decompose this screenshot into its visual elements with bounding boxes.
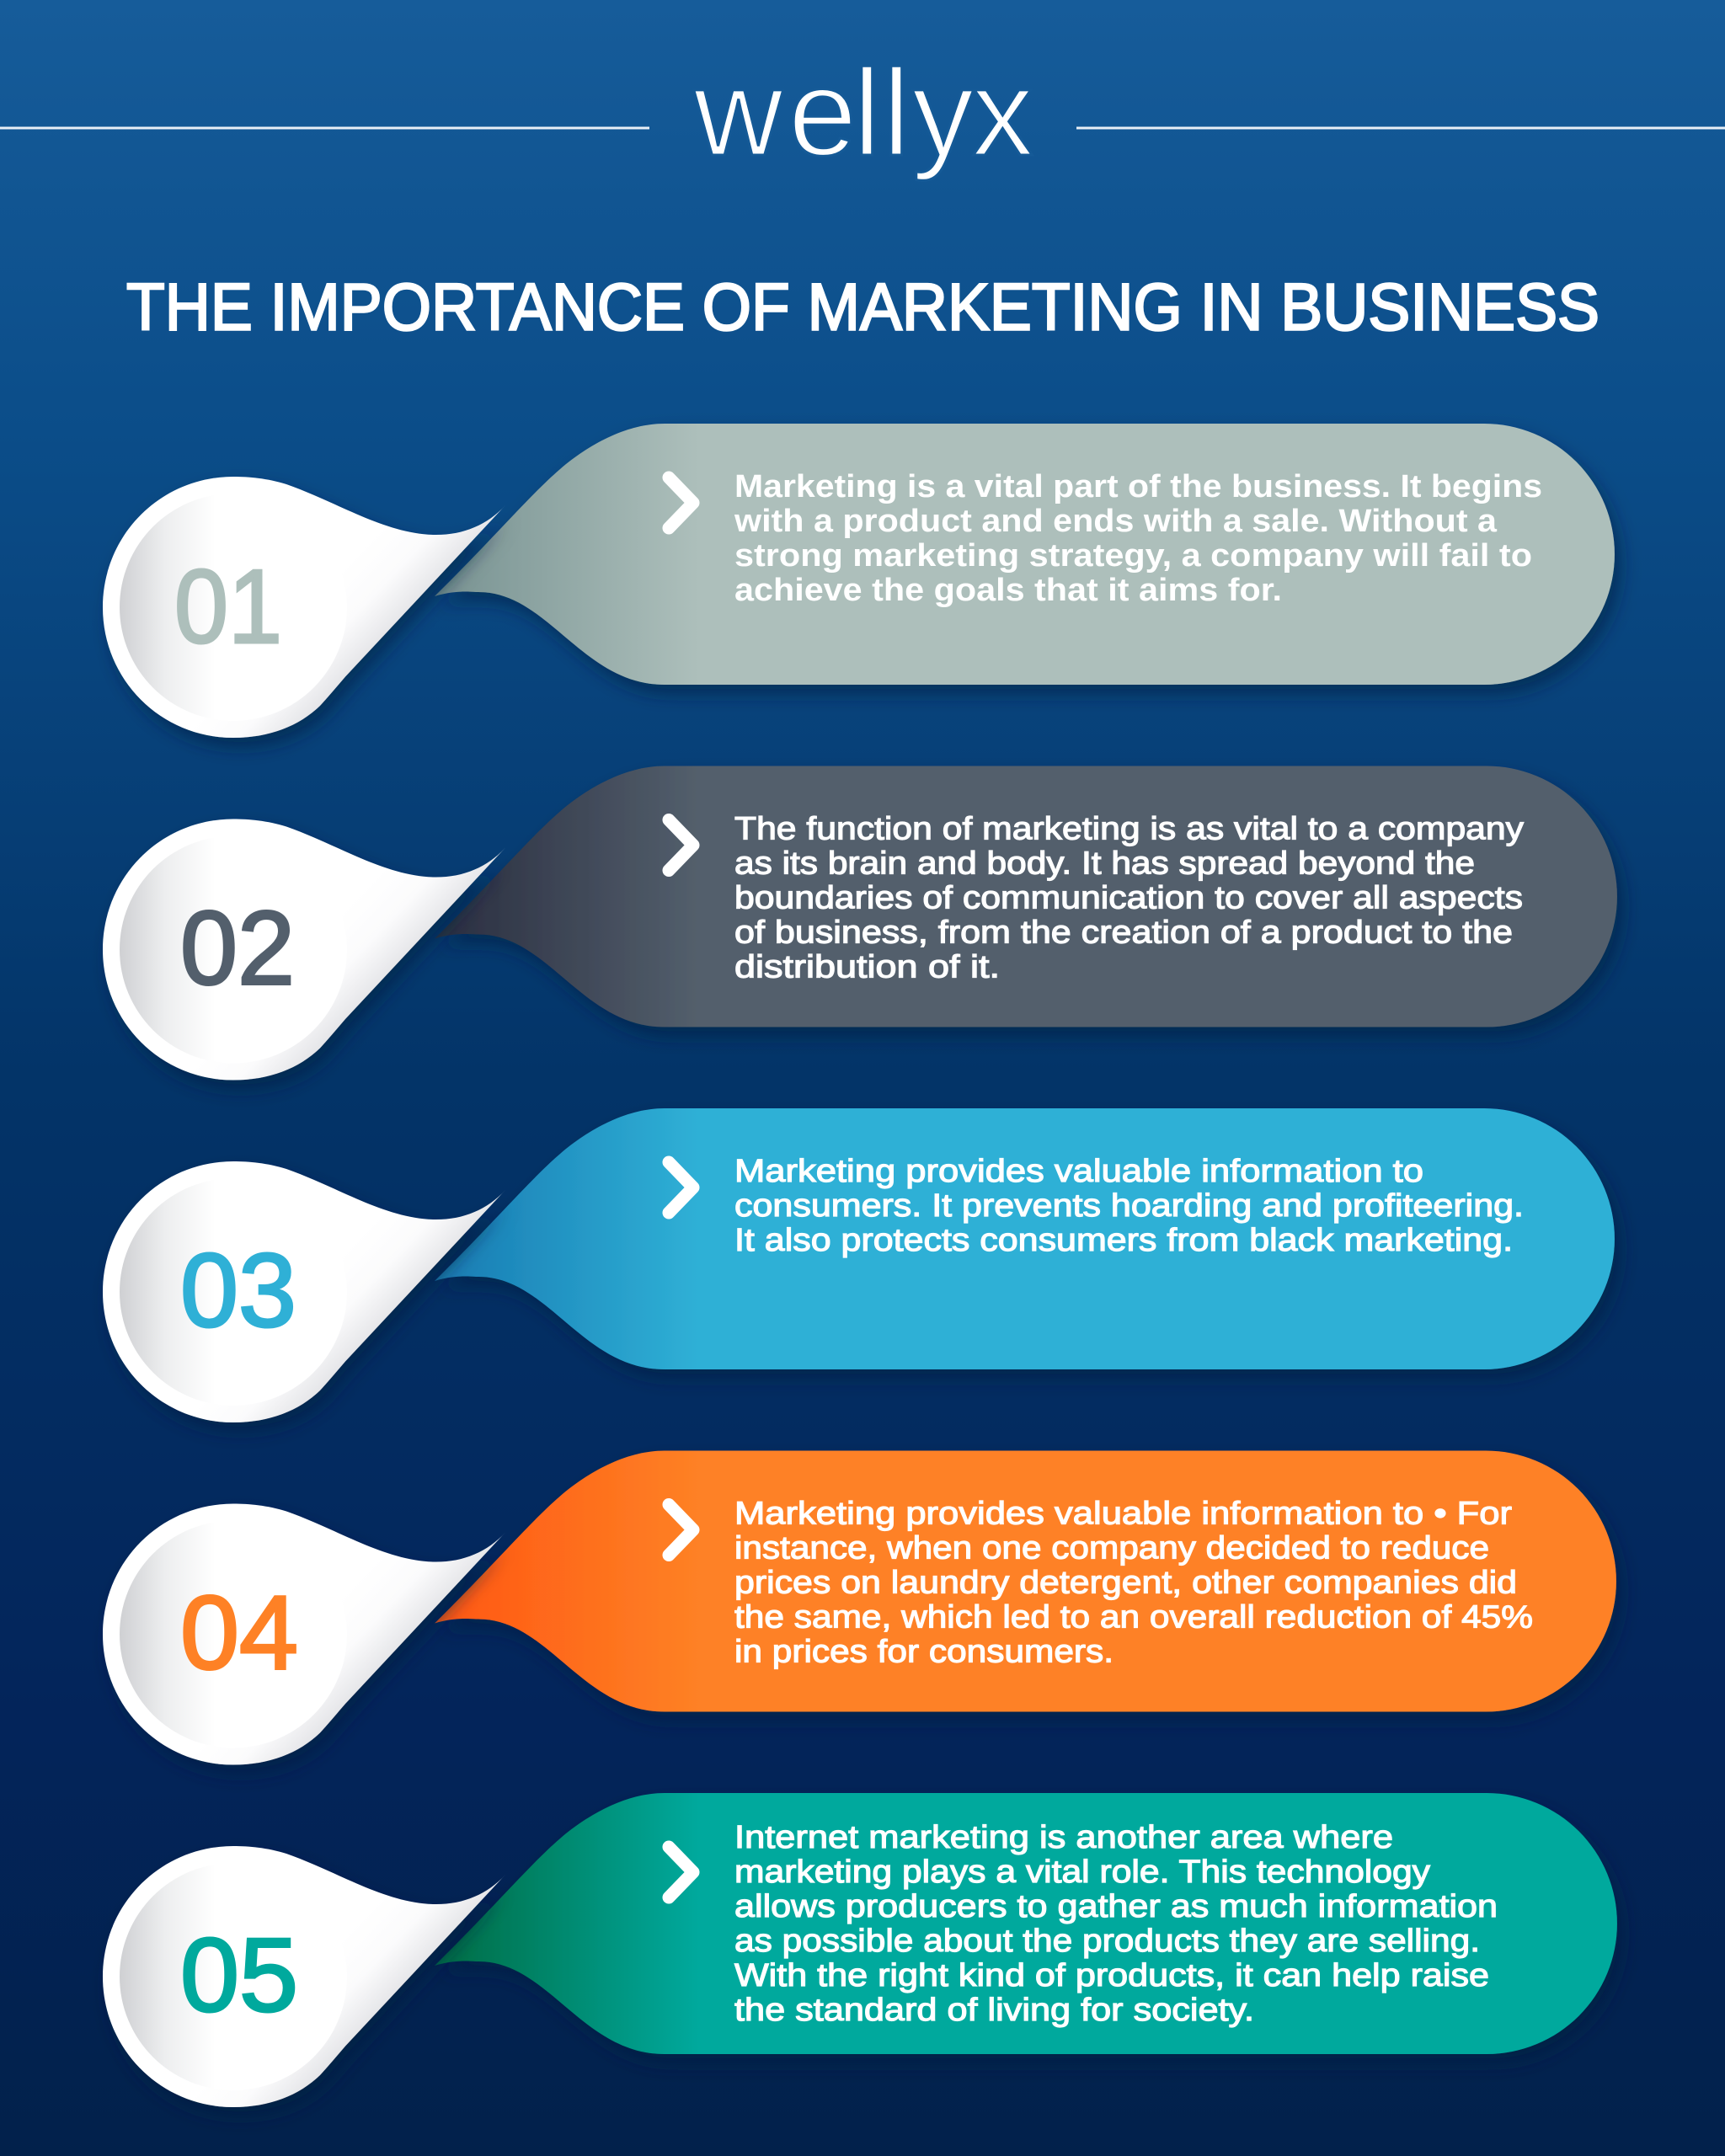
text 04: instance, when one company decided to reduce [734, 1531, 1489, 1566]
droplet 05 [103, 1846, 505, 2107]
panel: item 01 [103, 424, 1615, 738]
text 04: Marketing provides valuable information to • For [734, 1496, 1512, 1531]
number 01: 01 [174, 549, 282, 665]
text 04: in prices for consumers. [734, 1634, 1114, 1669]
droplet 04 [103, 1504, 505, 1765]
pill 03 [435, 1108, 1615, 1369]
text 01: Marketing is a vital part of the business. It begins [734, 469, 1542, 504]
text 05: allows producers to gather as much information [734, 1889, 1498, 1924]
chevron 05 [669, 1847, 693, 1897]
droplet 01 [103, 477, 505, 738]
pill 01 [435, 424, 1615, 685]
text 02: The function of marketing is as vital to a company [734, 812, 1524, 847]
title: THE IMPORTANCE OF MARKETING IN BUSINESS [126, 270, 1599, 344]
panel: item 03 [103, 1108, 1615, 1422]
header: logo with rules: wellyx [693, 44, 1033, 181]
number 03: 03 [180, 1233, 296, 1349]
panel: item 02 [103, 766, 1617, 1080]
chevron 04 [669, 1504, 693, 1555]
text 03 [734, 1154, 1524, 1258]
text 02: boundaries of communication to cover all aspects [734, 881, 1523, 916]
text 01: strong marketing strategy, a company will fail to [734, 538, 1532, 574]
text 03: Marketing provides valuable information to [734, 1154, 1423, 1189]
number 04: 04 [180, 1575, 298, 1691]
text 05 [734, 1820, 1498, 2028]
text 05: marketing plays a vital role. This technology [734, 1854, 1430, 1890]
text 02: as its brain and body. It has spread beyond the [734, 846, 1475, 881]
number 02: 02 [180, 891, 295, 1007]
text 05: the standard of living for society. [734, 1993, 1254, 2028]
text 05: as possible about the products they are selling. [734, 1924, 1480, 1959]
text 03: It also protects consumers from black marketing. [734, 1223, 1513, 1258]
header: logo with rules [0, 44, 1725, 181]
panel: item 04 [103, 1450, 1616, 1765]
droplet 03 [103, 1161, 505, 1422]
text 05: Internet marketing is another area where [734, 1820, 1393, 1855]
text 01: achieve the goals that it aims for. [734, 573, 1282, 608]
number 05: 05 [180, 1918, 298, 2034]
text 05: With the right kind of products, it can help raise [734, 1958, 1489, 1993]
text 03: consumers. It prevents hoarding and profiteering. [734, 1188, 1524, 1224]
text 02 [734, 812, 1524, 985]
pill 05 [435, 1793, 1617, 2054]
pill 04 [435, 1450, 1616, 1711]
chevron 03 [669, 1162, 693, 1213]
chevron 02 [669, 820, 693, 871]
text 04: the same, which led to an overall reduction of 45% [734, 1600, 1533, 1636]
text 02: distribution of it. [734, 950, 1000, 985]
pill 02 [435, 766, 1617, 1027]
text 02: of business, from the creation of a product to the [734, 915, 1513, 950]
text 04 [734, 1496, 1533, 1669]
text 01: with a product and ends with a sale. Without a [734, 504, 1498, 539]
text 04: prices on laundry detergent, other companies did [734, 1565, 1517, 1600]
chevron 01 [669, 478, 693, 528]
droplet 02 [103, 819, 505, 1080]
text 01 [734, 469, 1542, 608]
panel: item 05 [103, 1793, 1617, 2107]
